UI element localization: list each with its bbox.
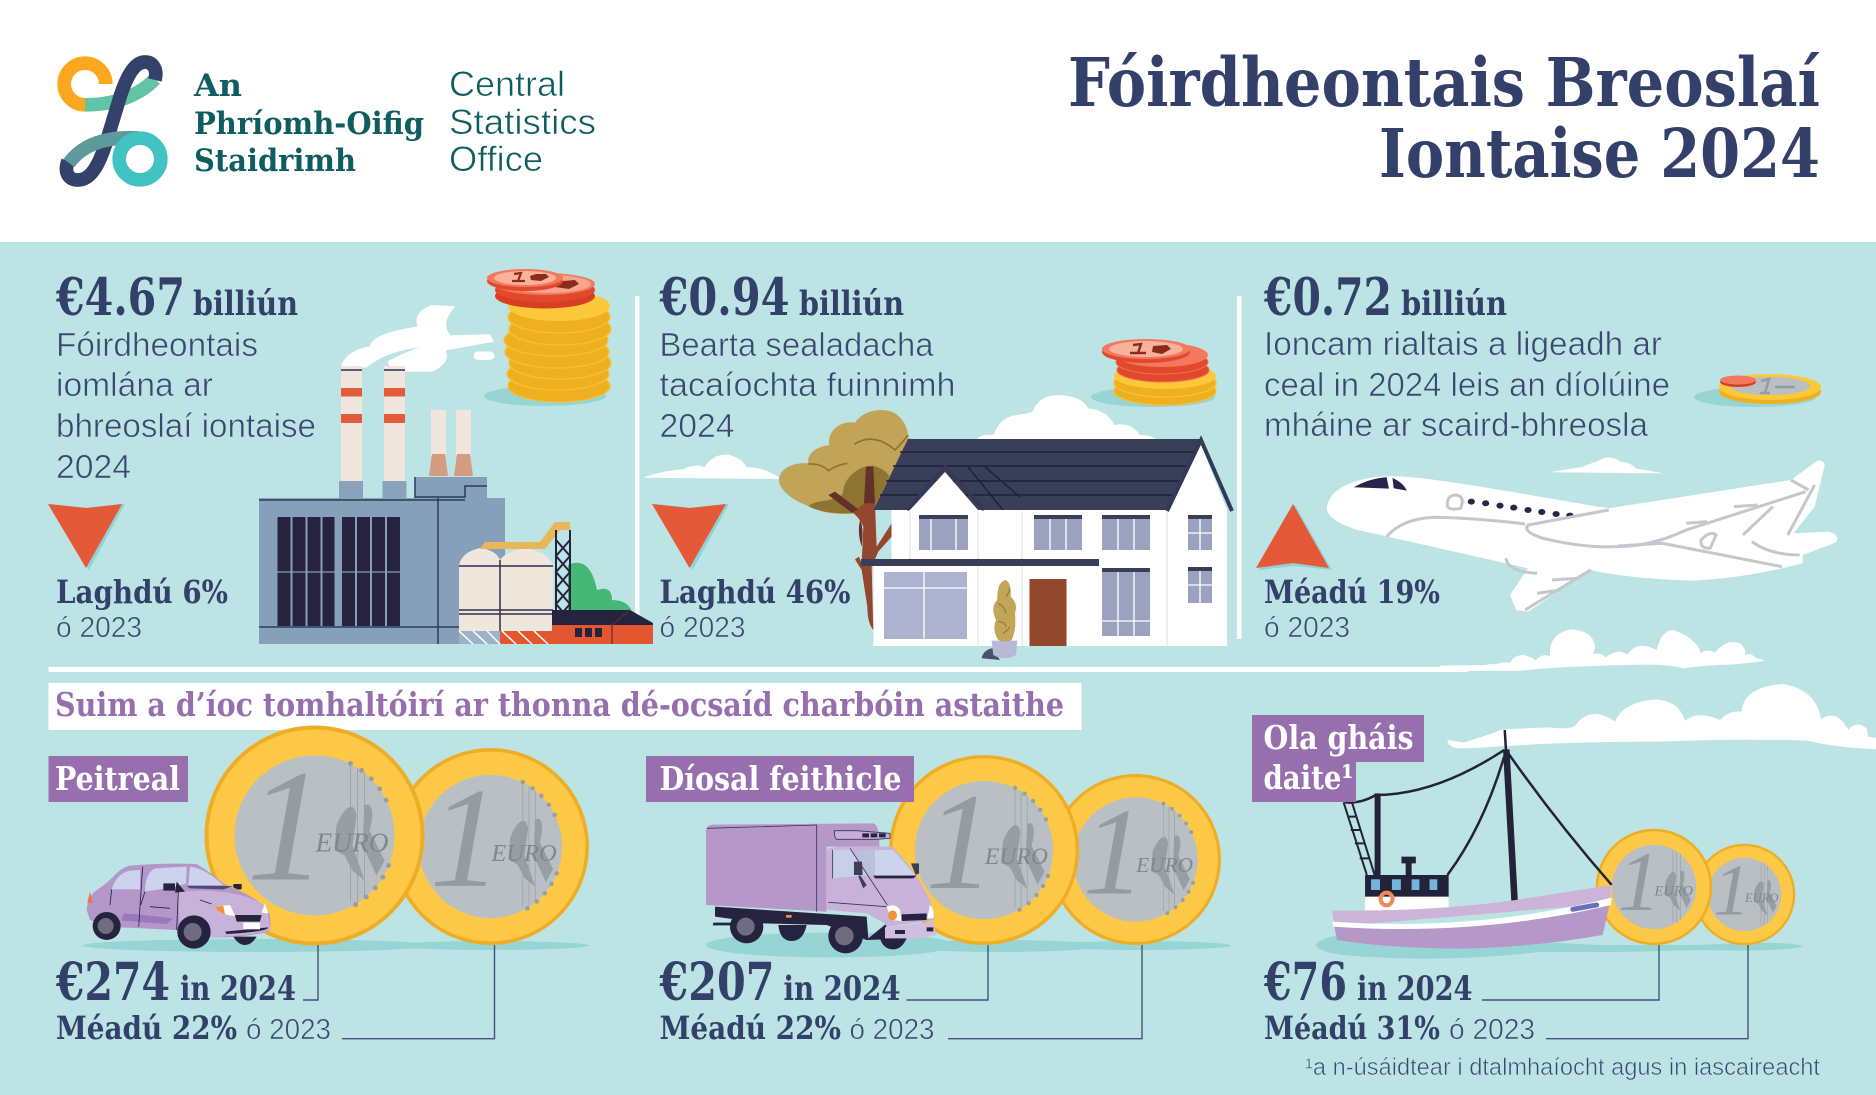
- text: description: iomlána ar: [56, 366, 213, 403]
- illustration: boat: [1332, 730, 1612, 949]
- stat: 0.94 billion: billiún: [799, 284, 904, 324]
- stat: 0.72 billion: €0.72: [1263, 268, 1392, 328]
- illustration: power plant: [259, 306, 653, 644]
- divider: vertical 1: [635, 296, 640, 639]
- logo text: English: Central: [449, 65, 565, 104]
- coin: 2024 back: [1052, 776, 1219, 943]
- text: change: Méadú 22%: [56, 1009, 237, 1047]
- text: description: bhreoslaí iontaise: [56, 407, 316, 444]
- stat: 4.67 billion: billiún: [193, 284, 298, 324]
- ground shadow: [1316, 934, 1803, 959]
- cloud: left of house: [643, 455, 779, 479]
- cloud: behind house: [976, 395, 1156, 440]
- windows: [919, 515, 1212, 636]
- stat: 0.94 billion: [659, 268, 904, 328]
- panel: petrol: [48, 728, 589, 1047]
- text: description: mháine ar scaird-bhreosla: [1264, 406, 1649, 443]
- logo: CSO: [64, 62, 596, 180]
- label: marked gas oil: Ola gháis: [1264, 718, 1414, 757]
- logo text: English: Office: [449, 140, 543, 179]
- text: description: tacaíochta fuinnimh: [660, 366, 956, 403]
- text: change: ó 2023: [56, 612, 142, 644]
- callout: leader lines: [906, 945, 1142, 1039]
- green bush: [568, 563, 632, 612]
- smoke: [343, 306, 495, 370]
- coin: 2024 back: EURO: [1135, 853, 1193, 877]
- label: marked gas oil: daite¹: [1264, 758, 1354, 797]
- panel: temporary energy measures: [652, 268, 1232, 660]
- small red building: [552, 623, 653, 644]
- stat: 207: [659, 952, 900, 1013]
- text: change: Méadú 19%: [1264, 573, 1440, 611]
- panel: total subsidies: [48, 268, 653, 644]
- text: description: Bearta sealadacha: [660, 326, 934, 363]
- silos: [459, 548, 553, 631]
- coin: 2024 front: 1: [925, 765, 994, 918]
- cloud: right edge: [1447, 684, 1876, 749]
- coin: 2024 back: EURO: [490, 840, 557, 867]
- text: description: [56, 326, 316, 485]
- logo text: English: Statistics: [449, 103, 596, 142]
- divider: vertical 2: [1237, 296, 1242, 639]
- coin: 2024 front: [891, 757, 1077, 943]
- cloud: on divider: [1440, 629, 1765, 671]
- logo text: English: [449, 65, 596, 179]
- coin: 2024 back: [1695, 845, 1794, 944]
- text: description: [660, 326, 956, 444]
- coin: 2024 back: 1: [1713, 850, 1750, 931]
- title: [1068, 43, 1820, 193]
- text: description: ceal in 2024 leis an díolúine: [1264, 366, 1670, 403]
- text: change: [1264, 573, 1440, 644]
- door: [1030, 579, 1066, 646]
- text: change: ó 2023: [1264, 612, 1350, 644]
- footnote: ¹a n-úsáidtear i dtalmhaíocht agus in iascaireacht: [1305, 1054, 1820, 1081]
- label: petrol: Peitreal: [55, 759, 180, 798]
- plant: [982, 580, 1017, 660]
- logo text: Irish: [193, 68, 424, 179]
- coin: 2024 front: [206, 728, 422, 944]
- text: change: ó 2023: [660, 612, 746, 644]
- callout: leader lines: [1482, 945, 1748, 1039]
- arrow: up: [1256, 504, 1332, 570]
- arrow: down: [652, 504, 729, 570]
- arrow: down: [48, 504, 125, 570]
- stat: 274: [55, 952, 296, 1013]
- stat: 76: in 2024: [1357, 969, 1472, 1009]
- conveyor: [480, 522, 570, 549]
- text: change: Laghdú 46%: [660, 573, 850, 611]
- illustration: car: [87, 864, 271, 949]
- stat: 4.67 billion: [55, 268, 298, 328]
- illustration: truck: [706, 823, 936, 953]
- chimneys: [339, 366, 473, 498]
- icon: coin stack large: [484, 269, 611, 406]
- stat: 274: €274: [55, 952, 170, 1013]
- coin: 2024 front: EURO: [1654, 883, 1693, 899]
- coin: 2024 back: EURO: [1744, 891, 1779, 905]
- text: description: Ioncam rialtais a ligeadh ar: [1264, 325, 1662, 362]
- stat: 0.72 billion: [1263, 268, 1507, 328]
- stat: 76: €76: [1263, 952, 1347, 1013]
- coin: 2024 front: 1: [246, 736, 326, 914]
- callout: leader lines: [303, 945, 494, 1039]
- illustration: house: [861, 439, 1232, 660]
- stat: 0.94 billion: €0.94: [659, 268, 790, 328]
- cloud: above plane: [1550, 457, 1664, 473]
- stat: 207: in 2024: [784, 969, 900, 1009]
- text: change: [56, 573, 228, 644]
- text: change: ó 2023: [1449, 1014, 1535, 1046]
- illustration: plane: [1327, 461, 1837, 612]
- logo text: Irish: Phríomh-Oifig: [194, 106, 424, 142]
- divider: horizontal: [48, 667, 1468, 672]
- icon: logo mark: [64, 62, 161, 180]
- illustration: tree: [779, 410, 915, 630]
- icon: coin small: [1694, 374, 1821, 407]
- heading strip: Suim a d’íoc tomhaltóirí ar thonna dé-ocsaíd charbóin astaithe: [55, 685, 1064, 724]
- coin: 2024 front: 1: [1618, 836, 1660, 929]
- text: change: [660, 573, 850, 644]
- coin: 2024 back: [394, 750, 587, 943]
- text: change: ó 2023: [850, 1014, 934, 1046]
- panel: diesel: [646, 756, 1231, 1047]
- stat: 274: in 2024: [180, 969, 296, 1009]
- stat: 207: €207: [659, 952, 774, 1013]
- stat: 0.72 billion: billiún: [1401, 284, 1507, 324]
- panel: jet fuel: [1256, 268, 1837, 644]
- text: change: ó 2023: [246, 1014, 331, 1046]
- label: diesel: Díosal feithicle: [660, 759, 902, 798]
- text: description: [1264, 325, 1670, 443]
- logo text: Irish: An: [193, 68, 242, 104]
- coin: 2024 back: 1: [430, 758, 501, 917]
- coin: 2024 front: [1597, 830, 1711, 944]
- logo text: Irish: Staidrimh: [194, 143, 356, 179]
- tower: [556, 530, 570, 644]
- text: description: 2024: [660, 407, 734, 444]
- coin: 2024 back: 1: [1083, 783, 1145, 921]
- ground shadow: [82, 939, 589, 952]
- text: change: Méadú 22%: [660, 1009, 841, 1047]
- ground shadow: [706, 932, 1231, 958]
- text: description: 2024: [56, 448, 131, 485]
- stat: 76: [1263, 952, 1472, 1013]
- coin: 2024 front: EURO: [314, 828, 388, 858]
- building: [259, 477, 505, 644]
- background band: [0, 242, 1876, 1095]
- coin: 2024 front: EURO: [984, 844, 1048, 870]
- porch band: [861, 559, 1099, 566]
- stat: 4.67 billion: €4.67: [55, 268, 185, 328]
- icon: coin stack medium: [1091, 339, 1216, 407]
- text: change: Laghdú 6%: [56, 573, 228, 611]
- panel: marked gas oil: [1252, 715, 1820, 1081]
- label: marked gas oil: [1252, 715, 1424, 802]
- text: description: Fóirdheontais: [56, 326, 258, 363]
- text: change: Méadú 31%: [1264, 1009, 1440, 1047]
